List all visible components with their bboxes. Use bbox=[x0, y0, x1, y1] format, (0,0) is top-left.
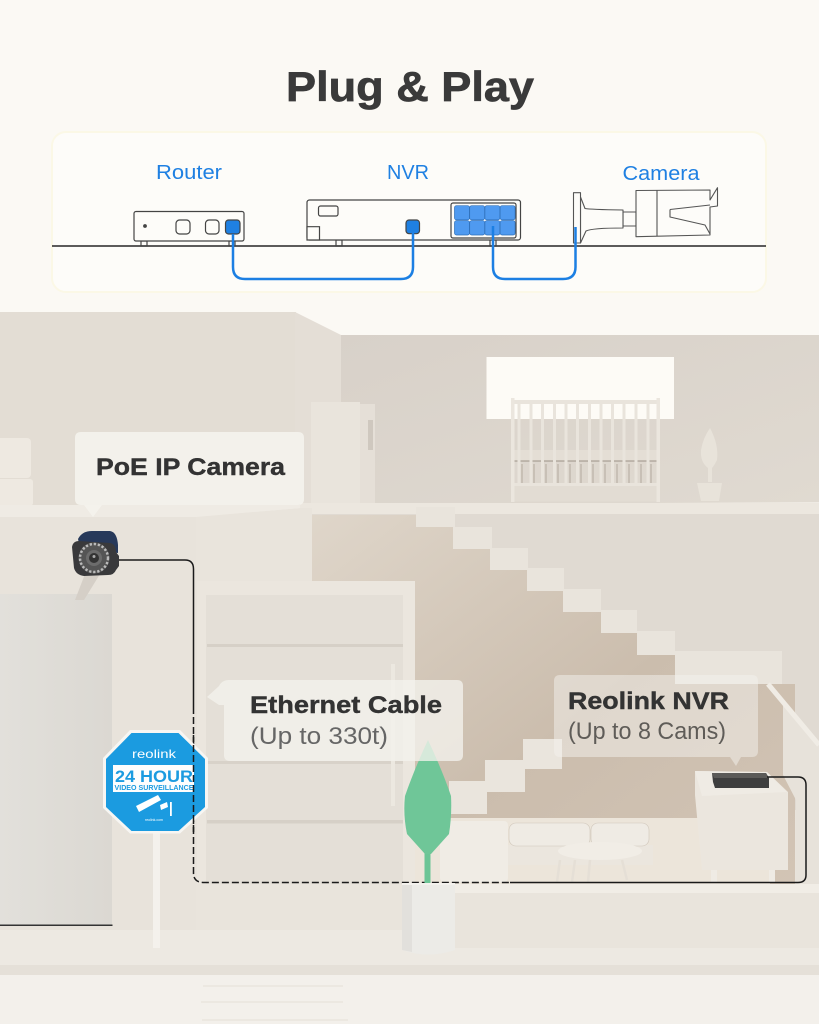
tree bbox=[404, 740, 451, 883]
cable: Ethernet solid section bbox=[118, 560, 806, 882]
icon: router device bbox=[134, 212, 244, 246]
garage door base line bbox=[0, 924, 112, 926]
panel: connection diagram bbox=[52, 132, 766, 292]
camera shadow bbox=[75, 574, 100, 600]
icon: NVR device bbox=[307, 200, 520, 246]
floor of living room bbox=[312, 818, 770, 884]
wall: right of stairs bbox=[312, 510, 819, 810]
wall: lower left bbox=[0, 517, 196, 935]
yard sign bbox=[103, 730, 208, 948]
callout: Ethernet Cable bbox=[207, 680, 463, 761]
sign heading: 24 HOUR bbox=[115, 767, 193, 786]
device: Reolink NVR bbox=[712, 773, 769, 788]
wardrobe bbox=[311, 402, 375, 504]
callout: Ethernet Cable: (Up to 330t) bbox=[250, 723, 388, 750]
house scene bbox=[0, 312, 819, 1024]
baseline shelf bbox=[52, 245, 766, 247]
front door bbox=[197, 581, 415, 933]
wall: upper angled side bbox=[295, 312, 341, 507]
label: Router: Router bbox=[156, 162, 222, 184]
sign camera icon bbox=[136, 795, 172, 816]
callout: Reolink NVR: (Up to 8 Cams) bbox=[568, 718, 726, 745]
wall: lower middle bbox=[196, 508, 312, 590]
wall: upper left bbox=[0, 312, 296, 507]
cable: Ethernet dashed section bbox=[194, 707, 510, 882]
camera: PoE IP camera device bbox=[72, 531, 119, 576]
sign subheading: VIDEO SURVEILLANCE bbox=[114, 785, 194, 792]
stairs upper flight bbox=[416, 507, 782, 684]
ground slab bbox=[196, 884, 819, 948]
sign url: reolink.com bbox=[145, 818, 163, 822]
label: NVR: NVR bbox=[387, 162, 429, 184]
cable over sign bbox=[192, 735, 194, 832]
shelf cushions left bbox=[0, 438, 33, 506]
title: Plug & Play bbox=[286, 63, 535, 110]
garage door bbox=[0, 594, 112, 925]
sign face bbox=[103, 730, 208, 834]
callout: PoE IP Camera bbox=[75, 432, 304, 517]
callout: PoE IP Camera: PoE IP Camera bbox=[96, 454, 286, 481]
potted plant small bbox=[697, 428, 722, 501]
cable: router to NVR bbox=[233, 233, 413, 279]
crib bbox=[511, 398, 660, 502]
label: Camera: Camera bbox=[622, 163, 700, 185]
stairs lower flight bbox=[449, 739, 562, 814]
callout: Ethernet Cable: Ethernet Cable bbox=[250, 692, 442, 719]
callout: Reolink NVR bbox=[554, 675, 758, 766]
sign logo: reolink bbox=[132, 747, 177, 761]
wall: lower base bbox=[0, 512, 819, 952]
stair void bbox=[312, 515, 795, 884]
wall: upper right bbox=[341, 335, 819, 507]
pot bbox=[402, 884, 455, 954]
sign pole bbox=[153, 832, 160, 948]
icon: bullet camera bbox=[574, 188, 718, 243]
sofa bbox=[440, 821, 653, 882]
callout: Reolink NVR: Reolink NVR bbox=[568, 688, 729, 715]
window bbox=[486, 357, 674, 419]
right wall bbox=[768, 684, 819, 884]
cable: NVR to camera bbox=[493, 226, 576, 279]
cabinet bbox=[695, 771, 788, 882]
front steps bbox=[201, 985, 348, 1021]
coffee table bbox=[557, 842, 642, 882]
floor slab bbox=[0, 502, 819, 517]
